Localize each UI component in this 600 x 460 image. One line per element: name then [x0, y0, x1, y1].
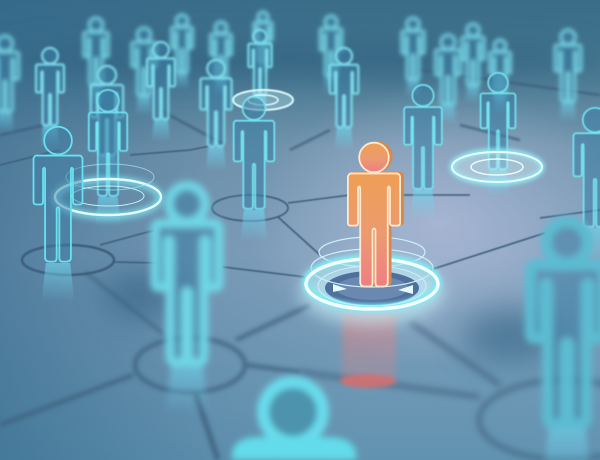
blurred foreground figure right — [530, 222, 600, 460]
back row figures (out of focus) — [0, 12, 581, 133]
blurred foreground figure centre — [155, 186, 219, 414]
front left figure — [34, 127, 82, 301]
middle row figures — [36, 30, 358, 181]
floor shadows — [0, 44, 600, 361]
red reflection under orange figure — [340, 312, 396, 388]
blurred foreground figure bottom — [232, 382, 356, 460]
orange figure platform — [300, 237, 444, 324]
orange figure — [348, 142, 403, 287]
icon: platform arrows — [333, 284, 413, 294]
glow ring: right platform — [452, 151, 542, 183]
glow ring: left platform — [55, 164, 161, 216]
small glow ring behind figures — [233, 90, 293, 110]
sharp blue figures — [89, 73, 600, 262]
